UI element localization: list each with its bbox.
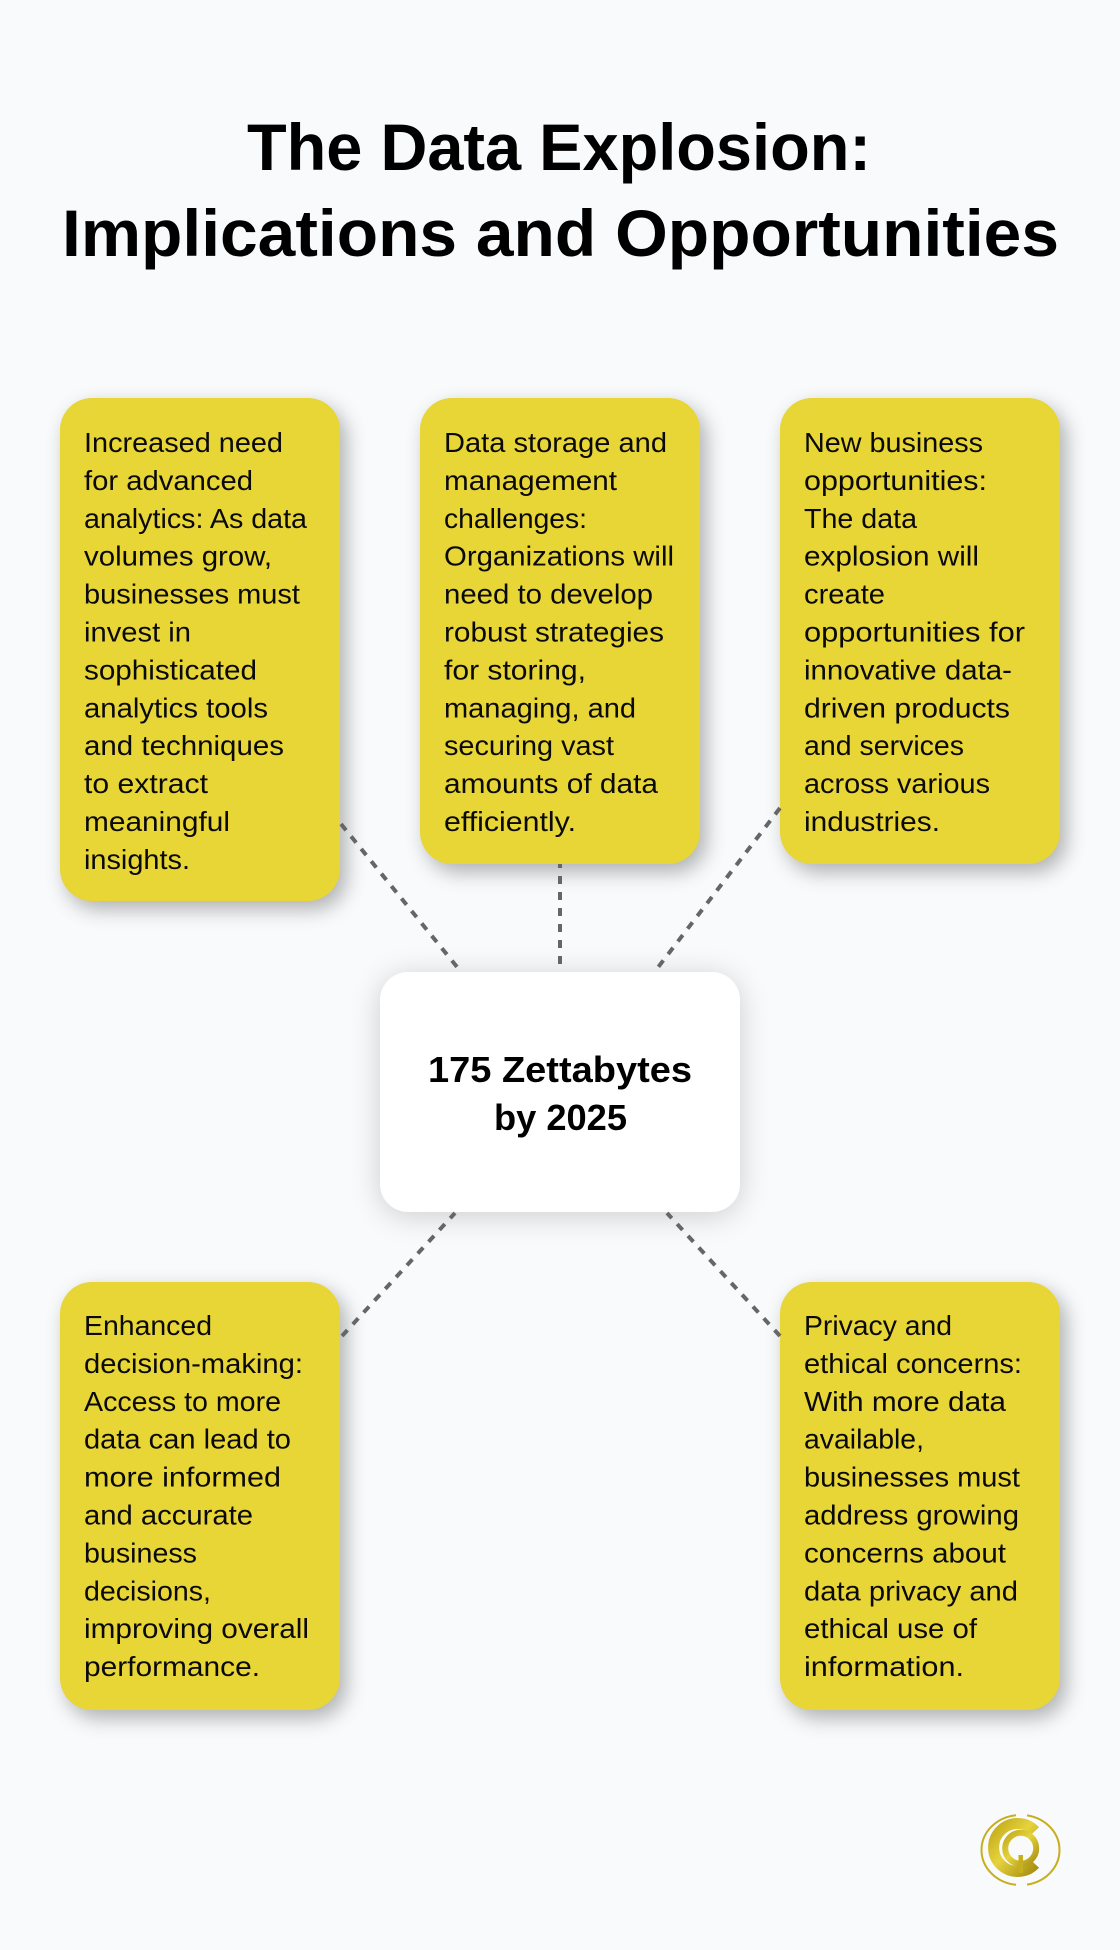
panel: increased need for advanced analytics: to extract — [84, 768, 208, 799]
panel: increased need for advanced analytics: and techniques — [84, 730, 284, 761]
panel: enhanced decision-making: improving overall — [84, 1613, 309, 1644]
panel: enhanced decision-making: decision-making: — [84, 1348, 303, 1379]
panel: data storage and management challenges: for storing, — [444, 654, 586, 685]
panel: new business opportunities: opportunities: — [804, 465, 987, 496]
panel: increased need for advanced analytics: insights. — [84, 844, 190, 875]
connector: analytics card to center — [341, 824, 460, 970]
panel: new business opportunities: New business — [804, 427, 983, 458]
connector: center to privacy card — [667, 1213, 780, 1336]
panel: enhanced decision-making: decisions, — [84, 1575, 211, 1606]
panel: new business opportunities: innovative data- — [804, 654, 1012, 685]
panel: data storage and management challenges: efficiently. — [444, 806, 576, 837]
panel: data storage and management challenges: managing, and — [444, 692, 636, 723]
title: The Data Explosion: — [247, 110, 871, 184]
panel: increased need for advanced analytics: sophisticated — [84, 654, 257, 685]
panel: privacy and ethical concerns: ethical use of — [804, 1613, 977, 1644]
panel: privacy and ethical concerns: available, — [804, 1424, 924, 1455]
panel: center node, 175 Zettabytes by 2025: 175 Zettabytes — [428, 1049, 692, 1090]
panel: privacy and ethical concerns — [780, 1282, 1060, 1710]
panel: increased need for advanced analytics: meaningful — [84, 806, 230, 837]
panel: privacy and ethical concerns: Privacy and — [804, 1310, 952, 1341]
title: Implications and Opportunities — [62, 196, 1059, 270]
panel: enhanced decision-making: more informed — [84, 1462, 281, 1493]
panel: new business opportunities: opportunities for — [804, 616, 1025, 648]
panel: increased need for advanced analytics — [60, 398, 340, 901]
icon: gold logo — [980, 1814, 1060, 1886]
connector: center to decision-making card — [342, 1213, 455, 1336]
panel: increased need for advanced analytics: analytics: As data — [84, 503, 307, 534]
panel: new business opportunities — [780, 398, 1060, 864]
panel: new business opportunities: explosion will — [804, 541, 979, 572]
panel: enhanced decision-making: performance. — [84, 1651, 260, 1682]
panel: new business opportunities: and services — [804, 730, 964, 761]
panel: increased need for advanced analytics: analytics tools — [84, 692, 268, 723]
panel: enhanced decision-making: and accurate — [84, 1500, 253, 1530]
panel: privacy and ethical concerns: businesses must — [804, 1462, 1020, 1493]
panel: data storage and management challenges: robust strategies — [444, 616, 664, 648]
panel: data storage and management challenges: amounts of data — [444, 768, 658, 799]
panel: data storage and management challenges: securing vast — [444, 730, 614, 761]
panel: increased need for advanced analytics: volumes grow, — [84, 541, 272, 572]
panel: privacy and ethical concerns: data privacy and — [804, 1575, 1018, 1606]
title — [62, 110, 1059, 270]
panel: privacy and ethical concerns: concerns about — [804, 1537, 1006, 1568]
panel: data storage and management challenges: need to develop — [444, 579, 653, 610]
panel: privacy and ethical concerns: ethical concerns: — [804, 1348, 1022, 1379]
panel: privacy and ethical concerns: address growing — [804, 1500, 1019, 1530]
connector: storage card to center — [558, 864, 562, 964]
panel: enhanced decision-making: Access to more — [84, 1386, 281, 1417]
connector: business card to center — [656, 808, 780, 970]
panel: increased need for advanced analytics: for advanced — [84, 465, 253, 496]
panel: enhanced decision-making — [60, 1282, 340, 1710]
panel: new business opportunities: driven products — [804, 692, 1010, 723]
panel: new business opportunities: create — [804, 579, 885, 610]
panel: increased need for advanced analytics: businesses must — [84, 579, 300, 610]
panel: new business opportunities: industries. — [804, 806, 940, 837]
panel: data storage and management challenges: Data storage and — [444, 427, 667, 458]
panel: increased need for advanced analytics: Increased need — [84, 427, 283, 458]
panel: new business opportunities: across various — [804, 768, 990, 799]
panel: enhanced decision-making: business — [84, 1537, 197, 1568]
panel: enhanced decision-making: data can lead to — [84, 1424, 291, 1455]
panel: data storage and management challenges: challenges: — [444, 503, 587, 534]
panel: center node, 175 Zettabytes by 2025: by 2025 — [494, 1097, 627, 1138]
panel: privacy and ethical concerns: With more data — [804, 1386, 1006, 1417]
panel: data storage and management challenges: management — [444, 465, 617, 496]
panel: enhanced decision-making: Enhanced — [84, 1310, 212, 1341]
panel: new business opportunities: The data — [804, 503, 917, 534]
panel: increased need for advanced analytics: invest in — [84, 616, 191, 648]
panel: center node, 175 Zettabytes by 2025 — [380, 972, 740, 1212]
panel: data storage and management challenges: Organizations will — [444, 541, 674, 572]
panel: privacy and ethical concerns: information. — [804, 1651, 964, 1682]
panel: data storage and management challenges — [420, 398, 700, 864]
